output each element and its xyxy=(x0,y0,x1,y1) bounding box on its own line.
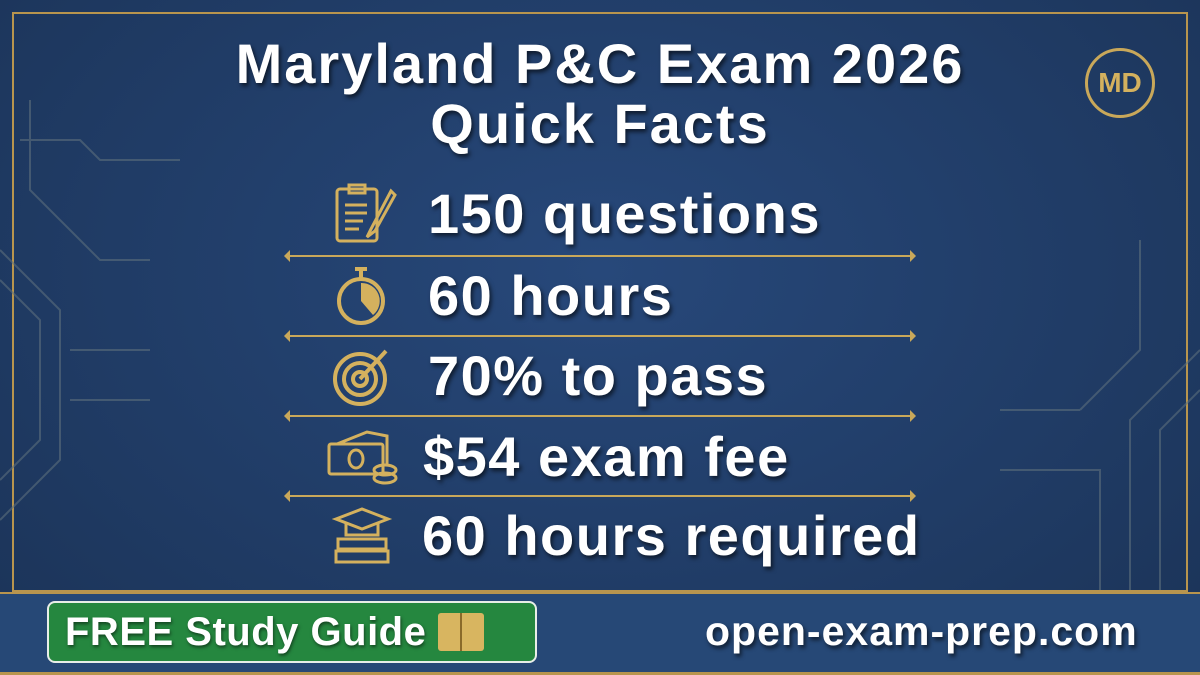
MD badge xyxy=(1085,48,1155,118)
icon: clipboard xyxy=(336,184,397,242)
circuit decoration left xyxy=(0,100,180,520)
title: Maryland P&C Exam 2026 xyxy=(236,32,964,95)
icon: target xyxy=(333,350,388,406)
footer band xyxy=(0,592,1200,675)
title: Quick Facts xyxy=(430,92,770,155)
fact: hours: 60 hours xyxy=(428,264,673,327)
fact: pass: 70% to pass xyxy=(428,344,768,407)
icon: stopwatch xyxy=(337,267,385,325)
url: open-exam-prep.com xyxy=(705,608,1138,654)
circuit decoration right xyxy=(1000,240,1200,590)
title xyxy=(236,32,964,160)
fact: questions: 150 questions xyxy=(428,182,821,245)
icon: graduation books xyxy=(332,507,392,564)
icon: money xyxy=(328,430,398,484)
button: free study guide xyxy=(47,601,537,663)
MD badge: MD xyxy=(1098,67,1142,98)
button: free study guide: FREE Study Guide xyxy=(65,610,426,654)
fact: fee: $54 exam fee xyxy=(423,425,790,488)
fact: required: 60 hours required xyxy=(422,504,921,567)
